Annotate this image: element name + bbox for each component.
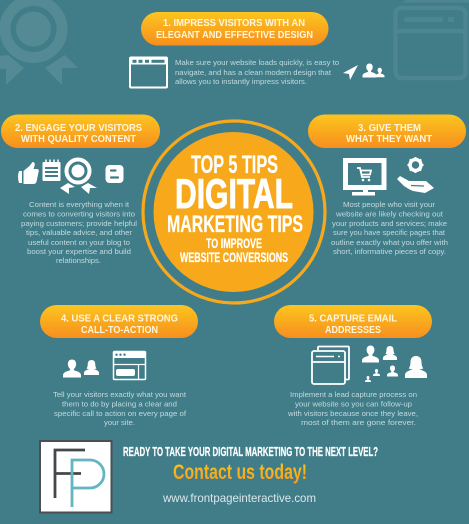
text: tip 1 body: Make sure your website loads quickly, is easy to	[175, 58, 339, 67]
heading pill: tip 5: ADDRESSES	[325, 325, 381, 336]
icon: notepad	[42, 160, 60, 181]
text: tip 3 body: outline exactly what you offer with	[331, 238, 448, 247]
text: tip 3 body: Most people who visit your	[343, 200, 436, 209]
contact heading: Contact us today!	[173, 461, 307, 484]
panel: tip 4	[40, 305, 198, 427]
subtitle: to improve: TO IMPROVE	[206, 235, 262, 251]
title: digital: DIGITAL	[175, 170, 293, 217]
text: tip 2 body	[21, 200, 137, 265]
heading pill: tip 3: WHAT THEY WANT	[346, 134, 432, 145]
text: tip 4 body: specific call to action on every page of	[54, 409, 187, 418]
text: tip 3 body: short, informative pieces of copy.	[333, 247, 446, 256]
panel: tip 1	[130, 12, 384, 88]
text: tip 4 body	[53, 390, 187, 427]
watermark: browser window	[396, 1, 469, 78]
text: tip 3 body: sure you have specific pages that	[333, 228, 446, 237]
icon: paper plane	[343, 65, 358, 80]
heading pill: tip 2	[1, 114, 160, 148]
heading pill: tip 4	[40, 305, 198, 338]
text: tip 4 body: them to do by placing a clear and	[62, 400, 177, 408]
icon: thumbs up	[18, 162, 39, 184]
text: tip 4 body: your site.	[104, 418, 135, 427]
text: tip 5 body	[287, 390, 418, 427]
panel: tip 2	[1, 114, 160, 265]
heading pill: tip 2: 2. ENGAGE YOUR VISITORS	[15, 123, 142, 134]
icon: call-to-action window	[114, 352, 146, 380]
icon: gear	[408, 157, 424, 173]
text: tip 5 body: your website so you can follow-up	[295, 400, 412, 408]
text: tip 3 body	[331, 200, 448, 256]
text: tip 2 body: useful content on your blog to	[28, 238, 130, 247]
icon: award ribbon	[60, 160, 97, 194]
text: tip 2 body: relationships.	[56, 256, 101, 265]
panel: tip 5	[274, 305, 432, 427]
text: tip 3 body: website are likely checking out	[335, 210, 444, 218]
footer	[40, 441, 378, 512]
text: tip 1 body: allows you to instantly impress visitors.	[175, 77, 307, 86]
text: tip 5 body: Implement a lead capture process on	[290, 390, 417, 399]
text: tip 1 body	[175, 58, 339, 86]
watermark: award ribbon	[0, 0, 78, 85]
icon: blogger	[106, 165, 124, 183]
text: tip 2 body: boost your expertise and build	[27, 247, 131, 256]
subtitle: website conversions: WEBSITE CONVERSIONS	[180, 249, 288, 265]
title: marketing tips: MARKETING TIPS	[167, 211, 303, 238]
icon: monitor with cart	[346, 160, 384, 196]
heading pill: tip 5	[274, 305, 432, 338]
heading pill: tip 5: 5. CAPTURE EMAIL	[309, 314, 397, 324]
text: tip 4 body: Tell your visitors exactly what you want	[53, 390, 187, 399]
panel: tip 3	[308, 114, 466, 256]
icon: two people	[362, 64, 384, 78]
text: tip 2 body: paying customers; provide helpful	[21, 219, 137, 228]
website url: www.frontpageinteractive.com	[162, 491, 316, 505]
heading pill: tip 3: 3. GIVE THEM	[358, 123, 421, 134]
heading pill: tip 1	[141, 12, 328, 46]
heading pill: tip 2: WITH QUALITY CONTENT	[21, 134, 136, 145]
text: tip 5 body: most of them are gone forever.	[301, 418, 416, 427]
text: tip 5 body: with visitors because once they leave,	[287, 409, 418, 418]
center badge	[143, 121, 325, 303]
text: tip 3 body: your products and services; make	[332, 219, 447, 228]
heading pill: tip 1: 1. IMPRESS VISITORS WITH AN	[163, 18, 305, 29]
heading pill: tip 1: ELEGANT AND EFFECTIVE DESIGN	[156, 30, 313, 41]
icon: browser window	[130, 58, 167, 88]
icon: group of people	[362, 346, 427, 382]
text: tip 2 body: Content is everything when it	[29, 200, 130, 209]
badge disc	[154, 132, 314, 292]
icon: two people	[63, 360, 99, 378]
text: tip 2 body: comes to converting visitors into	[23, 210, 135, 218]
title: top 5 tips: TOP 5 TIPS	[191, 151, 278, 179]
icon: stacked windows	[312, 346, 349, 384]
heading pill: tip 4: CALL-TO-ACTION	[81, 325, 158, 336]
logo	[40, 441, 112, 512]
text: tip 1 body: navigate, and has a clean modern design that	[175, 68, 332, 77]
icon: open hand	[397, 176, 434, 193]
heading pill: tip 4: 4. USE A CLEAR STRONG	[61, 314, 178, 324]
heading pill: tip 3	[308, 114, 466, 148]
text: tip 2 body: tips, valuable advice, and other	[26, 228, 133, 237]
badge ring	[143, 121, 325, 303]
